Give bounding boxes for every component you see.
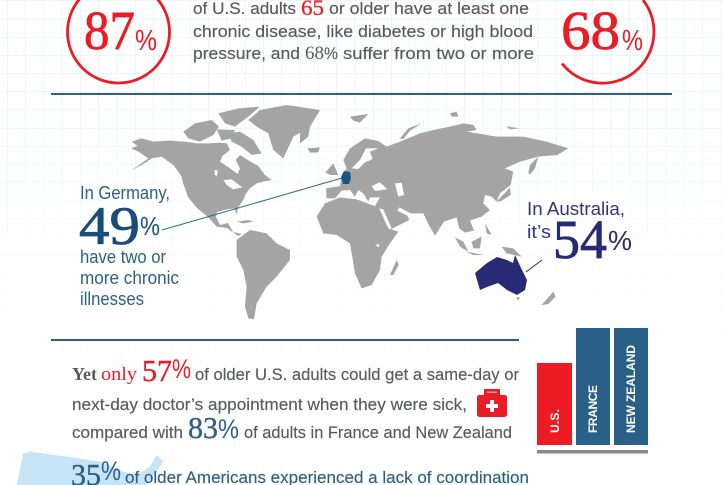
map: Australia highlight xyxy=(475,255,527,295)
68% red circle stat xyxy=(561,0,654,83)
68% red circle stat: % xyxy=(622,25,643,57)
87% red circle stat: 87 xyxy=(84,0,135,61)
same-day appointment text block xyxy=(72,353,519,445)
leader line to Germany xyxy=(162,178,342,230)
same-day appointment text block: next-day doctor’s appointment when they were sick, xyxy=(72,395,467,414)
world map xyxy=(131,105,568,319)
same-day appointment text block: 83 xyxy=(188,410,218,445)
87% red circle stat: % xyxy=(135,25,157,57)
leader line to Australia xyxy=(526,260,542,272)
map: Eurasia, Africa and islands xyxy=(300,110,568,305)
map: Germany highlight xyxy=(341,171,351,184)
same-day appointment text block: Yet xyxy=(72,364,97,384)
Germany callout: illnesses xyxy=(80,289,144,309)
bar: New Zealand: NEW ZEALAND xyxy=(624,345,638,433)
map: North America and Arctic islands xyxy=(131,107,272,236)
US map silhouette xyxy=(17,452,163,485)
Australia callout: 54 xyxy=(553,209,607,270)
Germany callout: % xyxy=(140,211,160,241)
same-day appointment text block: 57 xyxy=(142,353,172,388)
map: Greenland and South America xyxy=(237,105,320,319)
68% red circle stat: 68 xyxy=(561,0,620,61)
intro text block xyxy=(193,0,534,64)
87% red circle stat xyxy=(68,0,170,83)
intro text block: 68 xyxy=(305,43,324,64)
same-day appointment text block: compared with xyxy=(72,423,183,442)
Germany callout: In Germany, xyxy=(80,183,170,203)
bar chart: same-day access by country xyxy=(537,328,648,454)
Germany callout: more chronic xyxy=(80,268,179,288)
Germany callout: 49 xyxy=(79,196,140,256)
bar: France: FRANCE xyxy=(586,385,600,433)
same-day appointment text block: of adults in France and New Zealand xyxy=(244,423,512,442)
same-day appointment text block: % xyxy=(172,354,191,384)
care coordination text xyxy=(71,456,529,485)
icon: first aid kit xyxy=(477,389,507,417)
Germany callout xyxy=(79,183,179,309)
bar: U.S.: U.S. xyxy=(548,409,562,433)
Australia callout xyxy=(527,199,632,270)
intro text block: pressure, and xyxy=(193,44,300,63)
Australia callout: % xyxy=(608,225,632,256)
intro text block: % xyxy=(324,44,338,63)
Australia callout: In Australia, xyxy=(527,199,625,219)
same-day appointment text block: only xyxy=(101,364,138,385)
same-day appointment text block: % xyxy=(218,414,239,444)
Australia callout: it’s xyxy=(527,222,551,242)
intro text block: suffer from two or more xyxy=(343,44,534,63)
same-day appointment text block: of older U.S. adults could get a same-day or xyxy=(195,365,519,384)
intro text block: chronic disease, like diabetes or high blood xyxy=(193,22,533,41)
Germany callout: have two or xyxy=(80,247,166,267)
